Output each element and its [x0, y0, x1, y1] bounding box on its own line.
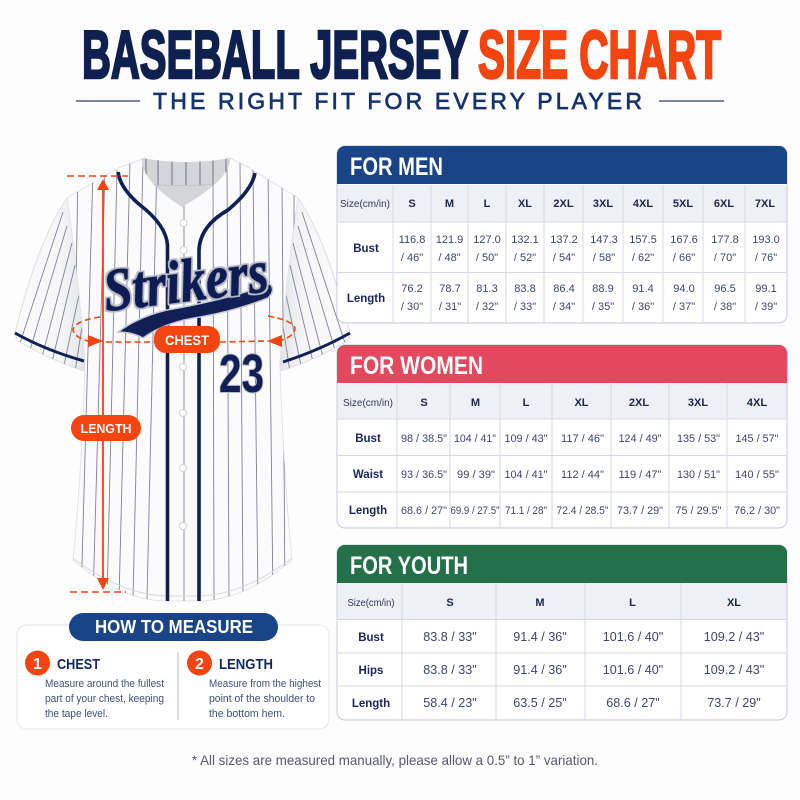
men bust row: Bust	[353, 243, 379, 255]
men length row: / 33"	[514, 301, 536, 313]
women size row: 3XL	[688, 397, 708, 409]
men length row: 99.1	[755, 283, 777, 295]
women bust row: 145 / 57"	[736, 433, 779, 445]
step 2: length: LENGTH	[219, 656, 273, 673]
youth length row: 68.6 / 27"	[606, 696, 660, 710]
youth bust row	[358, 630, 764, 644]
youth header: FOR YOUTH	[350, 552, 468, 580]
men length row: / 34"	[553, 301, 575, 313]
youth hips row: 83.8 / 33"	[423, 663, 477, 677]
panel: how to measure	[17, 613, 329, 729]
panel: for women	[337, 345, 787, 528]
buttons	[180, 220, 187, 530]
men size row: 5XL	[673, 198, 693, 210]
women length row	[349, 505, 780, 517]
step 1: chest	[25, 650, 164, 720]
women length row: Length	[349, 505, 387, 517]
length measurement arrow	[67, 176, 128, 592]
men size row: Size(cm/in)	[340, 199, 390, 210]
right sleeve	[281, 198, 350, 372]
women bust row	[355, 433, 779, 445]
women waist row: 99 / 39"	[457, 469, 495, 481]
men length row: / 39"	[755, 301, 777, 313]
women bust row: 135 / 53"	[677, 433, 720, 445]
youth size row: XL	[727, 597, 741, 609]
step 1: chest: CHEST	[57, 656, 100, 673]
women waist row: 93 / 36.5"	[401, 469, 447, 481]
youth size row: S	[446, 597, 454, 609]
men length row: 81.3	[476, 283, 498, 295]
women waist row: 119 / 47"	[618, 469, 662, 481]
men size row: M	[445, 198, 454, 210]
women length row: 73.7 / 29"	[617, 505, 663, 517]
men length row: / 31"	[439, 301, 461, 313]
men bust row: / 62"	[632, 252, 654, 264]
youth length row: 73.7 / 29"	[707, 696, 761, 710]
step 2: length: Measure from the highest	[209, 678, 321, 690]
women waist row: 104 / 41"	[504, 469, 548, 481]
men bust row: / 46"	[401, 252, 423, 264]
men length row: / 35"	[592, 301, 614, 313]
men size row	[340, 198, 775, 210]
men length row: 83.8	[514, 283, 536, 295]
women waist row: 112 / 44"	[561, 469, 604, 481]
women size row: L	[523, 397, 530, 409]
women size row	[343, 397, 767, 409]
men bust row: 167.6	[670, 234, 698, 246]
men bust row: / 76"	[755, 252, 777, 264]
youth hips row	[359, 663, 764, 677]
women length row: 68.6 / 27"	[401, 505, 447, 517]
men bust row: 116.8	[399, 234, 425, 246]
chest badge: CHEST	[165, 332, 209, 348]
women waist row: 140 / 55"	[735, 469, 779, 481]
women bust row: 117 / 46"	[561, 433, 604, 445]
men size row: 6XL	[714, 198, 734, 210]
length badge: LENGTH	[80, 421, 132, 436]
women size row: Size(cm/in)	[343, 398, 393, 409]
men header: FOR MEN	[350, 153, 443, 181]
youth length row: 63.5 / 25"	[513, 696, 567, 710]
men bust row: 121.9	[436, 234, 463, 246]
panel: for men	[337, 146, 787, 323]
panel: for youth	[337, 545, 787, 720]
step 2: length: the bottom hem.	[209, 708, 285, 720]
step 2: length: 2	[195, 656, 204, 673]
jersey illustration	[15, 158, 350, 601]
women bust row: 109 / 43"	[504, 433, 548, 445]
men length row: / 32"	[476, 301, 498, 313]
youth size row: L	[629, 597, 636, 609]
youth hips row: 101.6 / 40"	[603, 663, 663, 677]
women bust row: Bust	[355, 433, 381, 445]
women length row: 76.2 / 30"	[734, 505, 780, 517]
men length row: / 38"	[714, 301, 736, 313]
collar opening	[140, 158, 232, 207]
men size row: L	[484, 198, 491, 210]
men bust row: 137.2	[550, 234, 578, 246]
men length row: Length	[347, 293, 385, 305]
women size row: S	[420, 397, 428, 409]
heading pill: HOW TO MEASURE	[95, 617, 253, 637]
heading pill	[69, 613, 278, 641]
men bust row: / 70"	[714, 252, 736, 264]
men header	[337, 146, 787, 184]
youth hips row: 91.4 / 36"	[513, 663, 567, 677]
men size row: 4XL	[633, 198, 653, 210]
women bust row: 98 / 38.5"	[401, 433, 447, 445]
women length row: 71.1 / 28"	[505, 505, 547, 517]
women bust row: 124 / 49"	[618, 433, 662, 445]
men bust row: 147.3	[590, 234, 618, 246]
youth length row	[352, 696, 761, 710]
men bust row: 193.0	[752, 234, 780, 246]
men size row: 3XL	[593, 198, 613, 210]
youth length row: 58.4 / 23"	[423, 696, 477, 710]
men bust row: / 66"	[673, 252, 695, 264]
women size row: M	[471, 397, 480, 409]
women waist row: Waist	[353, 469, 383, 481]
title: BASEBALL JERSEY	[82, 17, 468, 93]
women header: FOR WOMEN	[350, 352, 483, 380]
men length row: 86.4	[553, 283, 575, 295]
men length row: / 37"	[673, 301, 695, 313]
women size row: XL	[574, 397, 589, 409]
youth hips row: Hips	[359, 665, 383, 677]
chest measurement arrows	[73, 316, 295, 347]
youth bust row: 109.2 / 43"	[704, 630, 764, 644]
women bust row: 104 / 41"	[454, 433, 496, 445]
subtitle: THE RIGHT FIT FOR EVERY PLAYER	[153, 88, 642, 114]
left sleeve	[15, 198, 84, 372]
men length row: 96.5	[714, 283, 736, 295]
youth size row: M	[535, 597, 545, 609]
men size row: S	[408, 198, 416, 210]
step 2: length: point of the shoulder to	[209, 693, 315, 705]
women waist row	[353, 469, 779, 481]
men size row: 2XL	[553, 198, 574, 210]
women size row: 4XL	[747, 397, 767, 409]
men bust row: / 48"	[438, 252, 461, 264]
women length row: 75 / 29.5"	[676, 505, 722, 517]
step 1: chest: 1	[33, 656, 42, 673]
men length row: 88.9	[592, 283, 614, 295]
youth bust row: Bust	[358, 632, 384, 644]
step 1: chest: part of your chest, keeping	[45, 693, 164, 705]
footnote: * All sizes are measured manually, please allow a 0.5” to 1” variation.	[192, 752, 598, 768]
placket piping	[118, 172, 255, 601]
men bust row: / 50"	[476, 252, 498, 264]
men bust row: 127.0	[473, 234, 501, 246]
men size row: 7XL	[755, 198, 775, 210]
men bust row: 177.8	[711, 234, 739, 246]
youth hips row: 109.2 / 43"	[704, 663, 764, 677]
women size row: 2XL	[629, 397, 649, 409]
youth header	[337, 545, 787, 583]
chest badge	[154, 326, 220, 353]
youth bust row: 101.6 / 40"	[603, 630, 663, 644]
jersey number: 23	[219, 344, 264, 404]
women header	[337, 345, 787, 383]
men bust row	[353, 234, 780, 264]
men bust row: 132.1	[511, 234, 539, 246]
men size row: XL	[518, 198, 532, 210]
youth size row: Size(cm/in)	[348, 598, 394, 609]
team script logo: Strikers	[100, 238, 271, 324]
youth bust row: 91.4 / 36"	[513, 630, 567, 644]
men length row: 94.0	[673, 283, 695, 295]
men bust row: 157.5	[629, 234, 657, 246]
men length row: / 30"	[401, 301, 423, 313]
step 2: length	[187, 650, 321, 720]
youth bust row: 83.8 / 33"	[423, 630, 477, 644]
men length row	[347, 283, 777, 313]
length badge	[71, 415, 141, 441]
men length row: / 36"	[632, 301, 654, 313]
youth size row	[348, 597, 741, 609]
men bust row: / 52"	[514, 252, 536, 264]
step 1: chest: the tape level.	[45, 708, 108, 720]
men length row: 78.7	[439, 283, 461, 295]
women waist row: 130 / 51"	[677, 469, 720, 481]
step 1: chest: Measure around the fullest	[45, 678, 164, 690]
men length row: 76.2	[401, 283, 423, 295]
women length row: 69.9 / 27.5"	[450, 505, 500, 517]
jersey body	[67, 158, 298, 601]
men bust row: / 58"	[593, 252, 615, 264]
youth length row: Length	[352, 698, 390, 710]
men length row: 91.4	[632, 283, 654, 295]
women length row: 72.4 / 28.5"	[556, 505, 609, 517]
men bust row: / 54"	[553, 252, 575, 264]
